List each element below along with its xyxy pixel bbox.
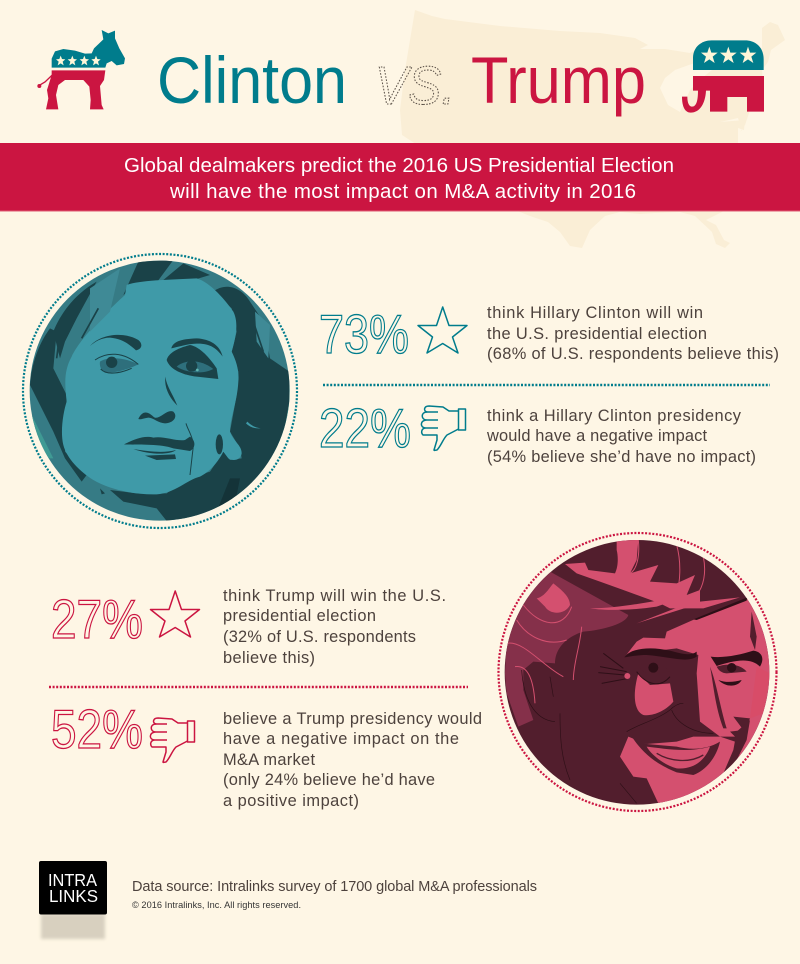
logo: Intralinks: LINKS <box>49 886 98 906</box>
icon: thumbs down <box>150 718 194 762</box>
stat: 27 percent: 27% <box>51 588 143 650</box>
text: Trump win: (32% of U.S. respondents <box>223 628 416 646</box>
stat: 52 percent: 52% <box>51 698 143 760</box>
text: Trump win: believe this) <box>223 649 315 667</box>
heading: vs.: VS. <box>375 56 455 116</box>
portrait: Hillary Clinton <box>23 254 297 528</box>
text: Clinton impact: (54% believe she’d have no impact) <box>487 448 756 466</box>
stat: 22 percent: 22% <box>319 397 411 459</box>
heading: Trump: Trump <box>471 43 646 117</box>
footer <box>39 861 537 939</box>
panel: Trump <box>49 533 776 811</box>
icon: star <box>150 591 200 637</box>
copyright: © 2016 Intralinks, Inc. All rights reserved. <box>132 900 301 910</box>
heading: Clinton: Clinton <box>157 43 347 117</box>
text: Trump win: think Trump will win the U.S. <box>223 587 446 605</box>
text: Clinton win: the U.S. presidential election <box>487 325 707 343</box>
icon: democratic donkey <box>37 30 125 109</box>
text: Clinton impact: would have a negative impact <box>486 427 707 445</box>
text: Trump win: presidential election <box>223 607 376 625</box>
stat: 73 percent: 73% <box>319 303 409 365</box>
background map of the United States <box>400 10 785 248</box>
logo: Intralinks: INTRA <box>48 870 97 890</box>
logo: Intralinks <box>39 861 107 939</box>
banner text <box>124 154 674 203</box>
text: Clinton impact <box>486 407 756 466</box>
icon: thumbs down <box>421 406 466 450</box>
text: Trump impact: have a negative impact on the <box>223 730 459 748</box>
icon: republican elephant <box>682 40 764 113</box>
text: Trump impact: a positive impact) <box>223 792 359 810</box>
banner <box>0 143 800 212</box>
portrait: Donald Trump <box>498 533 776 811</box>
icon: star <box>418 307 467 353</box>
text: Trump impact: M&A market <box>223 751 315 769</box>
banner text: will have the most impact on M&A activity in 2016 <box>169 180 636 203</box>
banner text: Global dealmakers predict the 2016 US Presidential Election <box>124 154 674 177</box>
header <box>37 30 764 117</box>
text: Clinton win <box>487 304 779 363</box>
text: Trump win <box>223 587 446 667</box>
text: Trump impact: believe a Trump presidency would <box>223 710 482 728</box>
text: Clinton win: think Hillary Clinton will win <box>487 304 703 322</box>
text: Trump impact: (only 24% believe he’d have <box>223 771 435 789</box>
text: Clinton impact: think a Hillary Clinton presidency <box>487 407 742 425</box>
text: Clinton win: (68% of U.S. respondents believe this) <box>487 345 779 363</box>
text: Trump impact <box>223 710 482 810</box>
data source: Data source: Intralinks survey of 1700 global M&A professionals <box>132 879 537 895</box>
panel: Clinton <box>23 254 779 528</box>
